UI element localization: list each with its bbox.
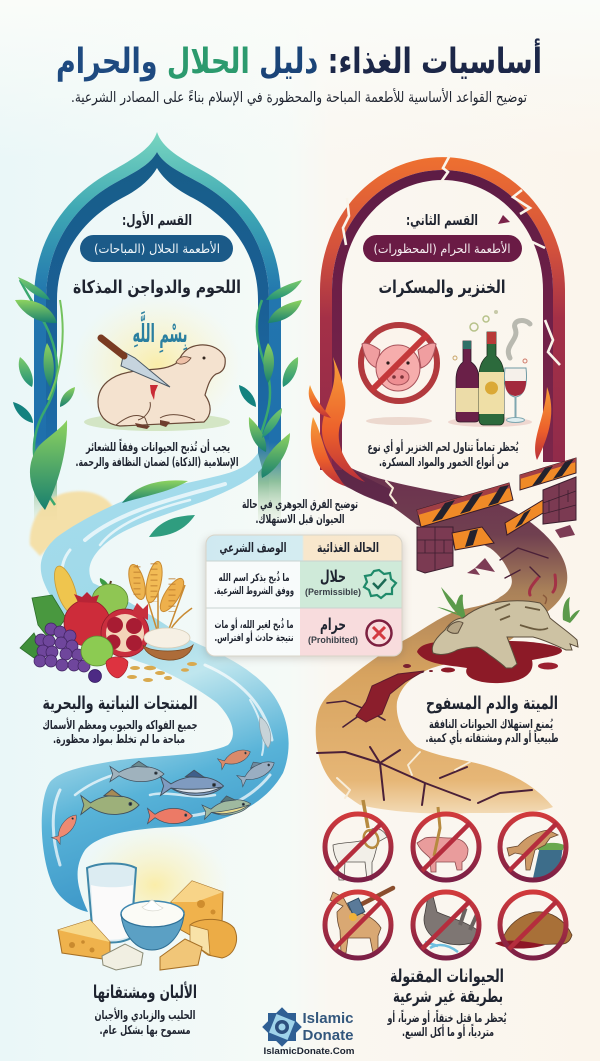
heading: section two (363, 213, 522, 262)
vines right (239, 280, 302, 478)
grains (127, 662, 197, 682)
row: halal: ما ذُبح بذكر اسم الله (218, 572, 290, 584)
fish: blue (160, 770, 224, 795)
fish: small orange (52, 812, 80, 844)
illustration: dairy products (58, 825, 237, 970)
panel: haram arch (320, 155, 565, 470)
row: halal: ووفق الشروط الشرعية. (214, 585, 294, 597)
left arch foot curving into road (318, 440, 393, 507)
carcass (432, 601, 578, 668)
heading and text: plants and seafood: المنتجات النباتية والبحرية (42, 694, 198, 714)
row: haram: حرام (320, 615, 346, 635)
row: halal (214, 567, 396, 598)
icon: goat struck by hammer (324, 888, 393, 958)
yogurt bowl (121, 901, 184, 927)
fish: green-blue (201, 792, 252, 819)
fish: red (148, 808, 192, 824)
heading: section one: القسم الأول: (122, 211, 192, 229)
vines left (13, 277, 75, 510)
row: haram: (Prohibited) (308, 635, 358, 645)
heading and text: plants and seafood: جميع الفواكه والحبوب ومعظم الأسماك (42, 717, 198, 733)
heading and text: carrion and blood (426, 694, 558, 746)
heading and text: dairy: الألبان ومشتقاتها (93, 981, 197, 1003)
row: halal: حلال (320, 567, 346, 586)
row: halal: (Permissible) (305, 587, 361, 597)
green apple (109, 581, 111, 588)
icon: strangled pig (412, 807, 480, 880)
heading and text: unlawfully killed animals (387, 967, 506, 1040)
cheese wedge front (160, 939, 202, 970)
icon: overturned animal (412, 892, 480, 958)
heading and text: unlawfully killed animals: متردياً، أو ما أكل السبع. (402, 1023, 494, 1040)
heading and text: unlawfully killed animals: بطريقة غير شرعية (393, 987, 503, 1007)
wine glass (504, 368, 527, 397)
green bottle (479, 332, 504, 425)
row: haram: نتيجة حادث أو افتراس. (214, 630, 294, 644)
pomegranate (64, 600, 110, 646)
leaves (32, 595, 66, 640)
rice bowl (144, 628, 190, 648)
row: haram: ما ذُبح لغير الله، أو مات (214, 617, 294, 631)
heading: section one (80, 211, 233, 262)
icon: red cross badge (366, 620, 392, 646)
fish: orange small (218, 746, 252, 770)
illustration: dead animal in blood (403, 587, 580, 683)
feta block (102, 944, 143, 970)
cut pomegranate (101, 609, 149, 657)
river (41, 453, 289, 912)
blood (150, 385, 158, 400)
pill label: halal (80, 235, 233, 262)
caption: difference between the two states: توضيح الفرق الجوهري في حالة (242, 497, 358, 512)
comparison table (204, 535, 404, 659)
knife (121, 352, 170, 387)
icon: strangled goat (324, 800, 392, 880)
striped beams (520, 458, 576, 490)
right wall (543, 477, 576, 524)
caption: difference between the two states (242, 497, 358, 527)
title: أساسيات الغذاء: دليل الحلال والحرام (56, 38, 542, 82)
grapes (34, 623, 90, 672)
leaves over the river (122, 480, 195, 537)
grass (437, 587, 466, 618)
heading and text: dairy (93, 981, 197, 1038)
heading: pork and intoxicants: الخنزير والمسكرات (378, 278, 506, 298)
row: haram (214, 615, 392, 646)
icon: animal falling from cliff (500, 814, 566, 880)
caption: difference between the two states: الحيوان قبل الاستهلاك. (256, 512, 344, 527)
text: halal meats description: الإسلامية (الذكاة) لضمان النظافة والرحمة. (76, 455, 238, 470)
cheese wedge left (58, 920, 110, 960)
fish: green (81, 789, 139, 814)
heading and text: unlawfully killed animals: الحيوانات المقتولة (390, 967, 504, 987)
heading: section two: القسم الثاني: (406, 213, 478, 229)
logo: Islamic Donate: IslamicDonate.Com (264, 1046, 354, 1056)
text: pork description (368, 438, 518, 470)
logo: Islamic Donate: Donate (302, 1028, 354, 1044)
cracks in the ground (317, 481, 556, 805)
sheep shadow (84, 413, 230, 431)
text: pork description: يُحظر تماماً تناول لحم الخنزير أو أي نوع (368, 438, 518, 455)
fish: grey (110, 761, 164, 782)
text: halal meats description: يجب أن تُذبح الحيوانات وفقاً للشعائر (85, 438, 230, 455)
milk glass (87, 864, 136, 942)
cheese wedge top right (171, 881, 223, 935)
single grape (88, 670, 102, 682)
heading and text: plants and seafood (42, 694, 198, 747)
heading and text: dairy: الحليب والزبادي والأجبان (94, 1007, 196, 1023)
strawberry (106, 657, 128, 678)
heading and text: dairy: مسموح بها بشكل عام. (100, 1023, 190, 1038)
fish in the river (52, 717, 277, 844)
logo: Islamic Donate: Islamic (302, 1011, 354, 1027)
prohibited killing icons (324, 800, 572, 958)
text: pork description: من أنواع الخمور والمواد المسكرة. (379, 454, 509, 470)
heading and text: plants and seafood: مباحة ما لم تخلط بمواد محظورة. (53, 732, 185, 747)
flames (309, 357, 551, 486)
smoke and bubbles (508, 321, 530, 358)
logo: Islamic Donate (262, 1007, 354, 1056)
sandy path and cursed road (316, 440, 567, 814)
table headers: الوصف الشرعي (220, 541, 286, 556)
arch cracks (343, 155, 560, 365)
icon: green check badge (364, 570, 396, 598)
glow behind halal panel (72, 295, 242, 435)
sheep (98, 345, 225, 426)
fish: faint (259, 717, 271, 748)
heading and text: unlawfully killed animals: يُحظر ما قتل خنقاً، أو ضرباً، أو (387, 1009, 506, 1026)
table headers (220, 541, 379, 556)
left wall (417, 527, 453, 573)
barricades and brick walls (417, 458, 576, 575)
pill label: haram (363, 235, 522, 262)
icon: mauled animal (495, 892, 572, 958)
pill label: haram: الأطعمة الحرام (المحظورات) (374, 241, 510, 257)
rubble (467, 525, 575, 575)
blood pool (417, 641, 562, 683)
illustration: wine bottles and glass (448, 310, 532, 427)
wheat (126, 560, 192, 640)
bismillah: بِسْمِ اللَّهِ (132, 311, 188, 353)
illustration: fruits and grains (20, 560, 197, 682)
fish: grey small (235, 754, 277, 787)
pill label: halal: الأطعمة الحلال (المباحات) (94, 241, 220, 256)
icon: star emblem (262, 1007, 302, 1047)
lime (81, 636, 113, 666)
round cheese (190, 919, 237, 958)
purple bottle (456, 341, 479, 422)
table headers: الحالة الغذائية (317, 541, 379, 556)
panel: halal arch (34, 132, 281, 520)
illustration: sheep with knife and bismillah (84, 311, 230, 431)
yellow mist at base of vine (30, 491, 115, 556)
heading: meats: اللحوم والدواجن المذكاة (73, 278, 241, 298)
text: halal meats description (76, 438, 238, 470)
illustration: crossed-out pig (361, 325, 437, 425)
glow (80, 825, 230, 945)
corn (50, 563, 82, 617)
